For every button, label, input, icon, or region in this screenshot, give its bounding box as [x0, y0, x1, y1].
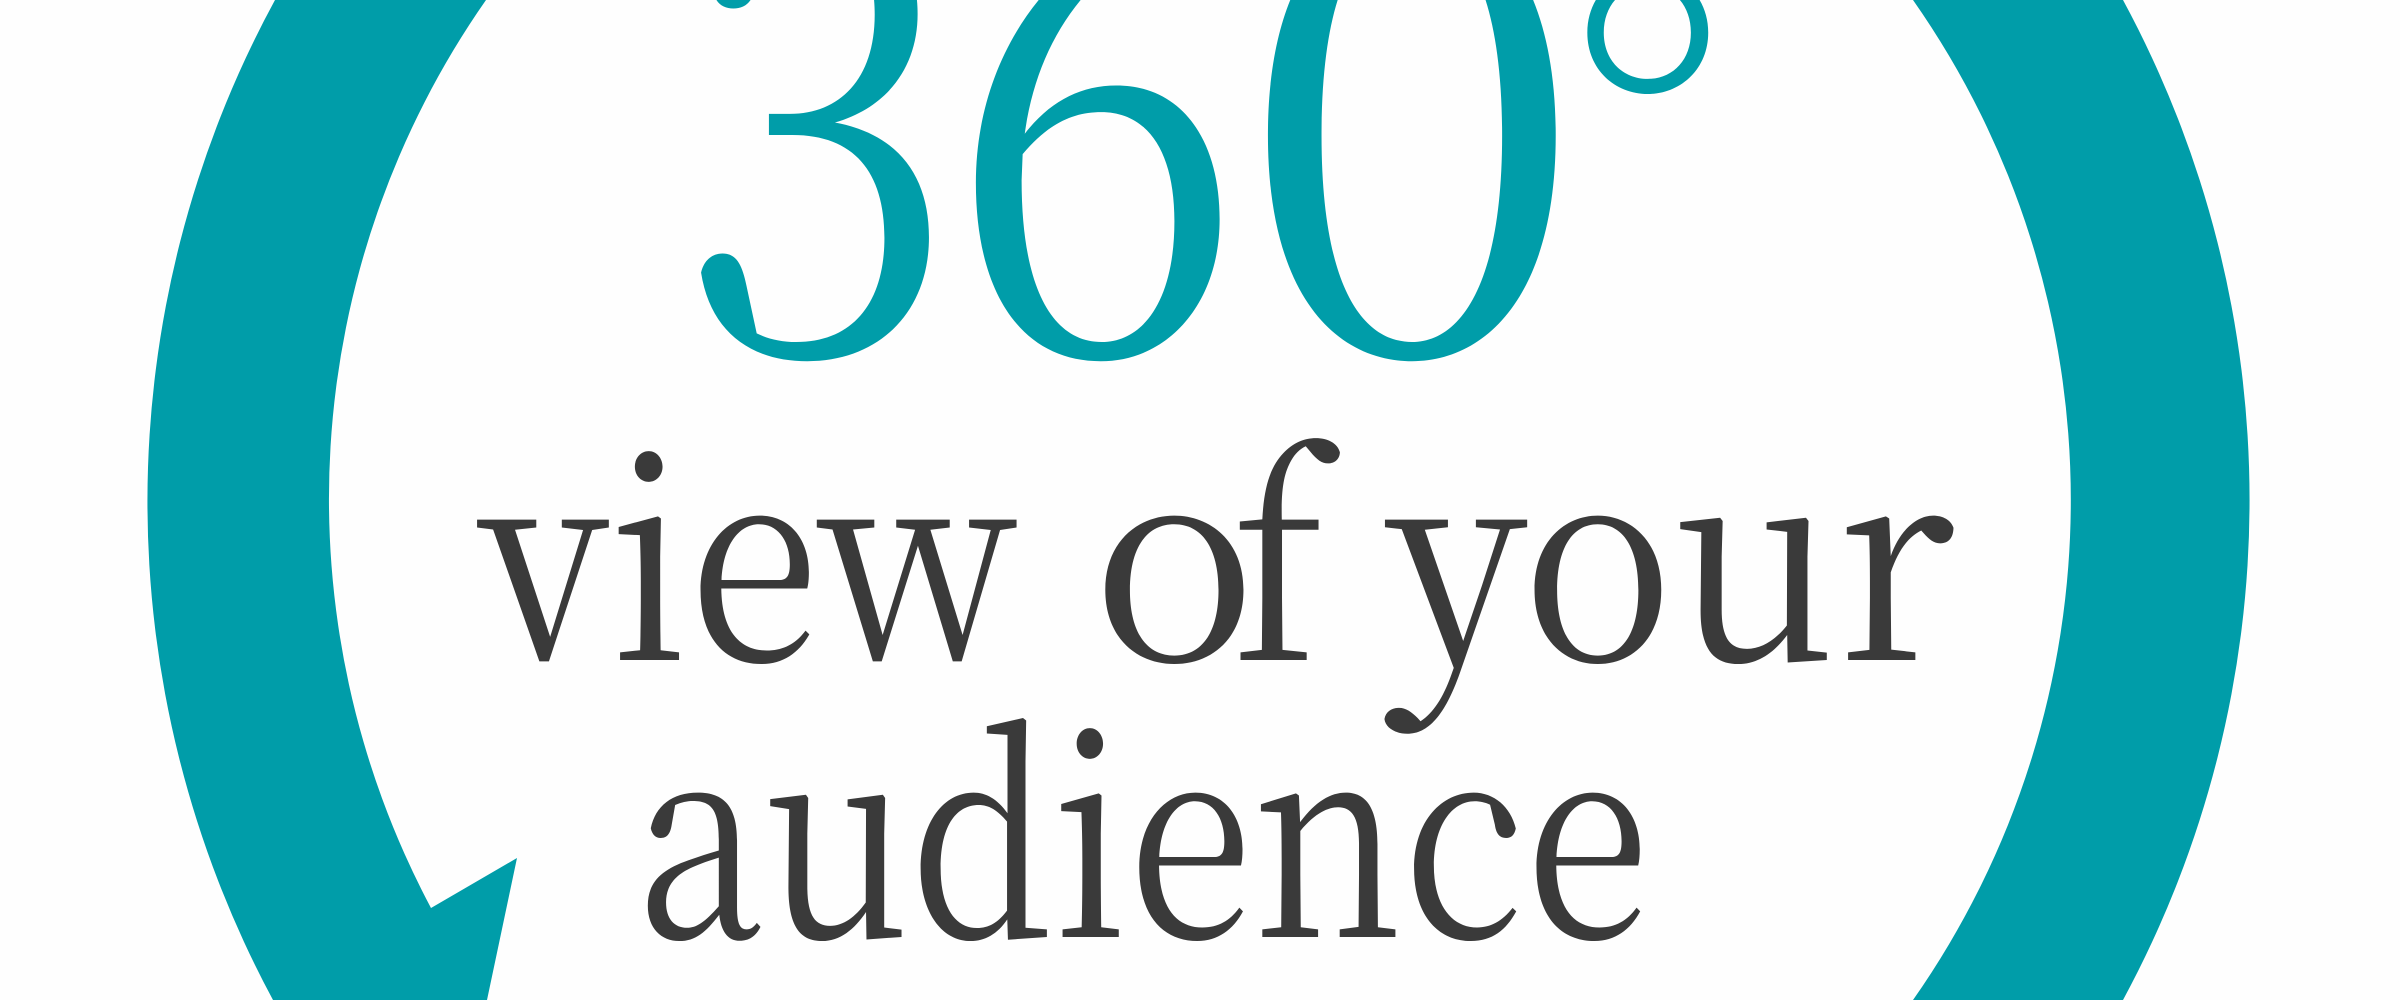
subheading: view of your audience: o	[1092, 347, 1257, 738]
subheading: view of your audience: f	[1232, 347, 1343, 738]
left circular arrow arc with arrowhead	[147, 0, 517, 1000]
subheading: view of your audience: your	[1383, 347, 1957, 738]
right circular arc	[1913, 0, 2250, 1000]
heading: 360 degrees	[676, 0, 1726, 530]
subheading: view of your audience: view	[475, 347, 1019, 738]
subheading: view of your audience	[475, 347, 1957, 1000]
